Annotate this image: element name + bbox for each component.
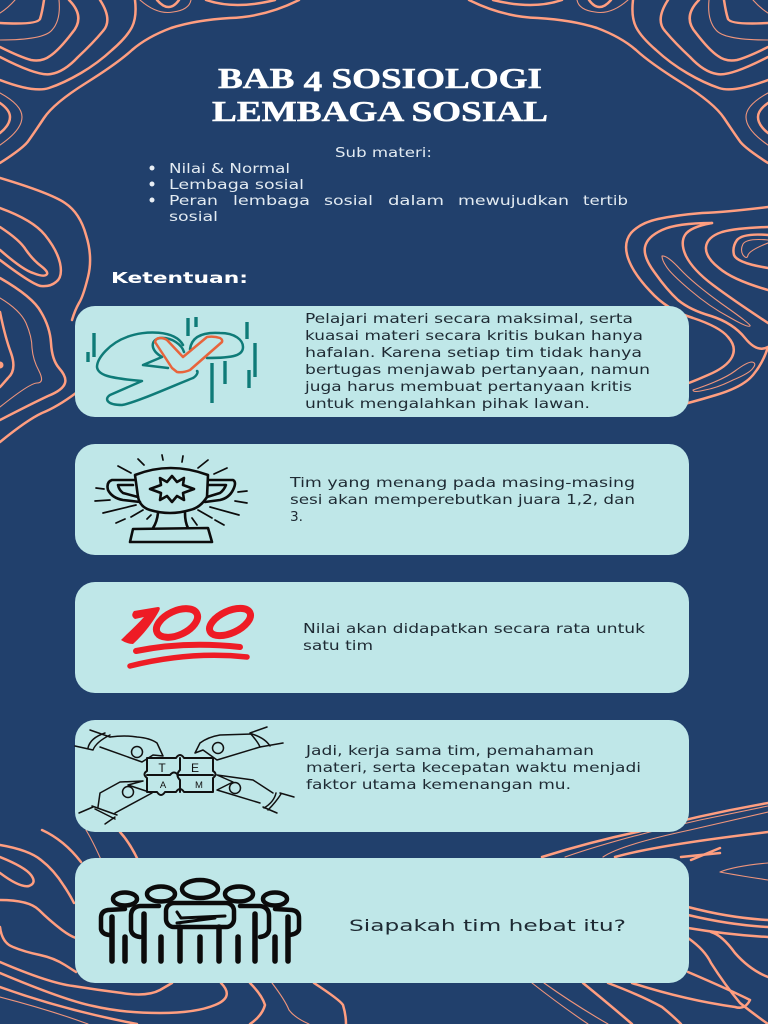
contour lines: top left [0, 0, 299, 163]
icon: hands assembling team puzzle: A [160, 780, 167, 791]
sub materi list: dalam [388, 194, 444, 209]
text: score rule: Nilai akan didapatkan secara rata untuk [303, 622, 645, 637]
panel: score rule [75, 582, 689, 693]
icon: hands assembling team puzzle [75, 727, 294, 824]
text: study rule: untuk mengalahkan pihak lawan. [305, 397, 590, 412]
text: score rule: satu tim [303, 639, 373, 654]
sub materi list [150, 162, 628, 225]
sub materi list: sosial [169, 210, 218, 225]
sub materi list: lembaga [233, 194, 310, 209]
icon: group of people [101, 880, 299, 961]
text: teamwork rule: materi, serta kecepatan waktu menjadi [306, 761, 641, 776]
text: winners rule: sesi akan memperebutkan juara 1,2, dan [290, 493, 635, 508]
sub materi list: tertib [583, 194, 628, 209]
sub materi list: sosial [324, 194, 373, 209]
text: study rule: bertugas menjawab pertanyaan, namun [305, 363, 650, 378]
contour lines: middle left [0, 178, 90, 442]
icon: hands assembling team puzzle: M [195, 780, 203, 791]
sub materi heading: Sub materi: [335, 146, 432, 161]
text: winners rule [289, 476, 635, 525]
icon: hands assembling team puzzle: E [191, 761, 199, 775]
panel: teamwork rule [75, 720, 689, 832]
icon: check mark speech swoosh [88, 317, 255, 405]
text: winners rule: Tim yang menang pada masing-masing [289, 476, 635, 491]
heading: ketentuan: Ketentuan: [111, 269, 248, 287]
text: study rule: Pelajari materi secara maksimal, serta [305, 312, 633, 327]
text: closing question: Siapakah tim hebat itu? [349, 916, 626, 935]
panel: study rule [75, 306, 689, 417]
text: study rule [304, 312, 650, 412]
text: teamwork rule [305, 744, 641, 793]
contour lines: middle right [626, 207, 768, 410]
text: teamwork rule: Jadi, kerja sama tim, pemahaman [305, 744, 594, 759]
title: BAB [218, 64, 276, 95]
title: 4 [304, 67, 322, 98]
icon: trophy [95, 455, 247, 542]
sub materi list: Peran [169, 194, 218, 209]
sub materi list: mewujudkan [458, 194, 569, 209]
panel: closing question [75, 858, 689, 983]
text: teamwork rule: faktor utama kemenangan mu. [306, 778, 571, 793]
text: score rule [303, 622, 645, 654]
title: LEMBAGA SOSIAL [212, 97, 548, 128]
text: study rule: juga harus membuat pertanyaan kritis [304, 380, 632, 395]
sub materi list: Lembaga sosial [169, 178, 304, 193]
contour lines: top right [469, 0, 768, 163]
text: winners rule: 3. [290, 510, 303, 525]
text: study rule: hafalan. Karena setiap tim tidak hanya [305, 346, 642, 361]
panel: winners rule [75, 444, 689, 555]
contour lines: bottom right [532, 803, 768, 1024]
title [212, 64, 548, 128]
text: study rule: kuasai materi secara kritis bukan hanya [305, 329, 643, 344]
sub materi list: Nilai & Normal [169, 162, 290, 177]
contour lines: bottom left [0, 830, 346, 1024]
title: SOSIOLOGI [322, 64, 542, 95]
icon: hands assembling team puzzle: T [158, 761, 166, 775]
icon: red 100 [121, 603, 255, 666]
